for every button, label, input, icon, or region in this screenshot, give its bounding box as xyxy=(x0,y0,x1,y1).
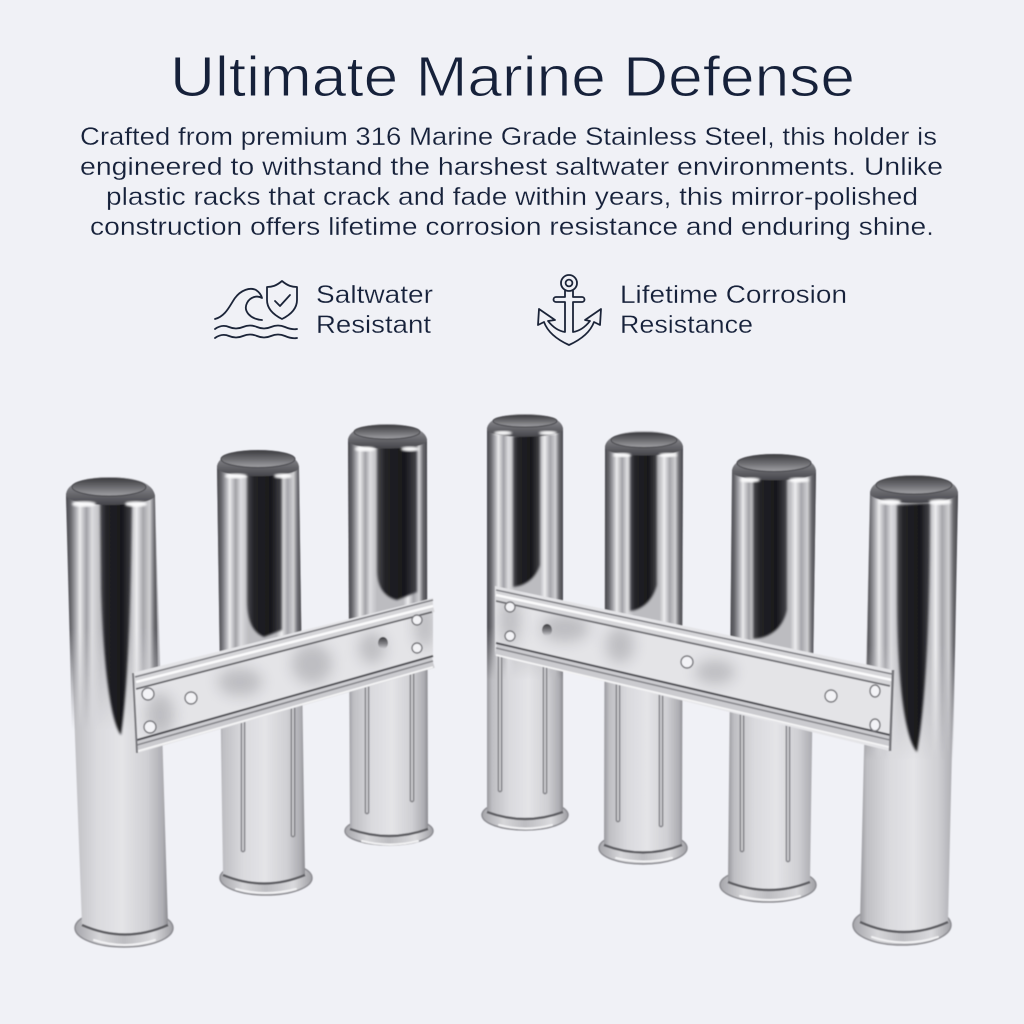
label: saltwater resistant: Saltwater xyxy=(316,281,433,309)
right mounting bracket xyxy=(495,586,893,751)
feature: lifetime corrosion resistance xyxy=(538,275,847,345)
label: saltwater resistant xyxy=(316,281,433,339)
icon: anchor xyxy=(538,275,601,345)
description paragraph: construction offers lifetime corrosion resistance and enduring shine. xyxy=(90,213,934,241)
tube 5 xyxy=(599,431,687,864)
description paragraph xyxy=(80,123,943,241)
title: Ultimate Marine Defense xyxy=(170,45,855,109)
product: seven-tube rod holder set xyxy=(66,414,958,947)
feature: saltwater resistant xyxy=(215,281,433,339)
label: lifetime corrosion resistance: Resistance xyxy=(620,311,753,339)
tube 1 xyxy=(66,477,173,947)
tube 6 xyxy=(720,454,816,902)
tube 4 xyxy=(482,414,568,830)
left bracket screw holes xyxy=(142,615,422,733)
left mounting bracket xyxy=(132,598,435,753)
tube 7 xyxy=(853,475,958,945)
tube 2 xyxy=(217,450,312,895)
label: saltwater resistant: Resistant xyxy=(316,311,431,339)
description paragraph: Crafted from premium 316 Marine Grade Stainless Steel, this holder is xyxy=(80,123,937,151)
description paragraph: engineered to withstand the harshest saltwater environments. Unlike xyxy=(80,153,943,181)
icon: wave and shield xyxy=(215,281,297,338)
label: lifetime corrosion resistance: Lifetime Corrosion xyxy=(620,281,847,309)
label: lifetime corrosion resistance xyxy=(620,281,847,339)
tube 3 xyxy=(345,424,433,845)
right bracket screw holes xyxy=(505,602,880,731)
description paragraph: plastic racks that crack and fade within years, this mirror-polished xyxy=(106,183,918,211)
